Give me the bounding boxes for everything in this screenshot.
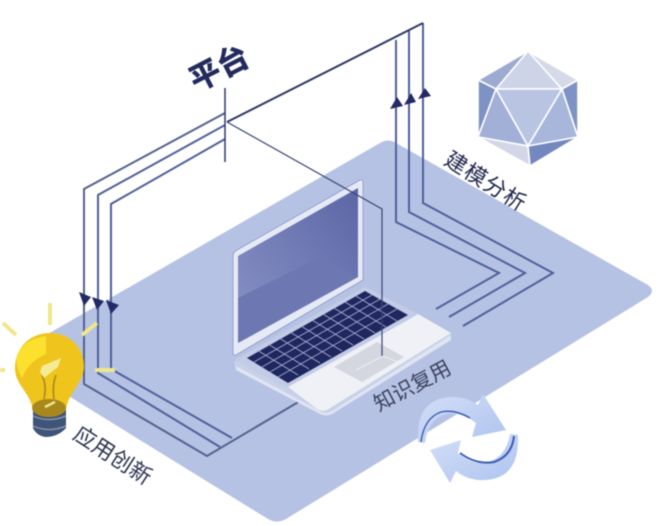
connector lines: left group (84, 113, 300, 456)
bulb filament (42, 375, 56, 399)
line from hub into touchpad (227, 122, 382, 356)
palm rest (288, 314, 451, 411)
bulb screw base (33, 403, 66, 437)
bulb highlight (17, 336, 46, 378)
label: modeling analysis: 建模分析 (440, 146, 531, 216)
screen frame (233, 180, 363, 355)
bulb collar (32, 399, 66, 417)
icon: refresh arrows (418, 394, 518, 483)
bottom arrow (430, 434, 518, 483)
icon: light bulb (0, 303, 115, 437)
keyboard (247, 291, 408, 383)
label: knowledge reuse: 知识复用 (370, 356, 455, 416)
icon: laptop (233, 180, 451, 416)
arrowheads pointing up (390, 88, 431, 109)
platform plane (20, 140, 652, 522)
platform hub lines (225, 23, 423, 162)
label: applied innovation: 应用创新 (69, 421, 156, 490)
bulb rays (0, 303, 115, 370)
display (238, 188, 358, 343)
platform label: 平台 (184, 39, 255, 98)
touchpad (334, 342, 404, 382)
arrowheads pointing down (79, 292, 119, 314)
bulb glass (15, 333, 84, 414)
icon: icosahedron (478, 51, 578, 166)
connector lines: right group (396, 23, 553, 326)
top arrow (418, 394, 506, 443)
laptop base (234, 289, 451, 416)
